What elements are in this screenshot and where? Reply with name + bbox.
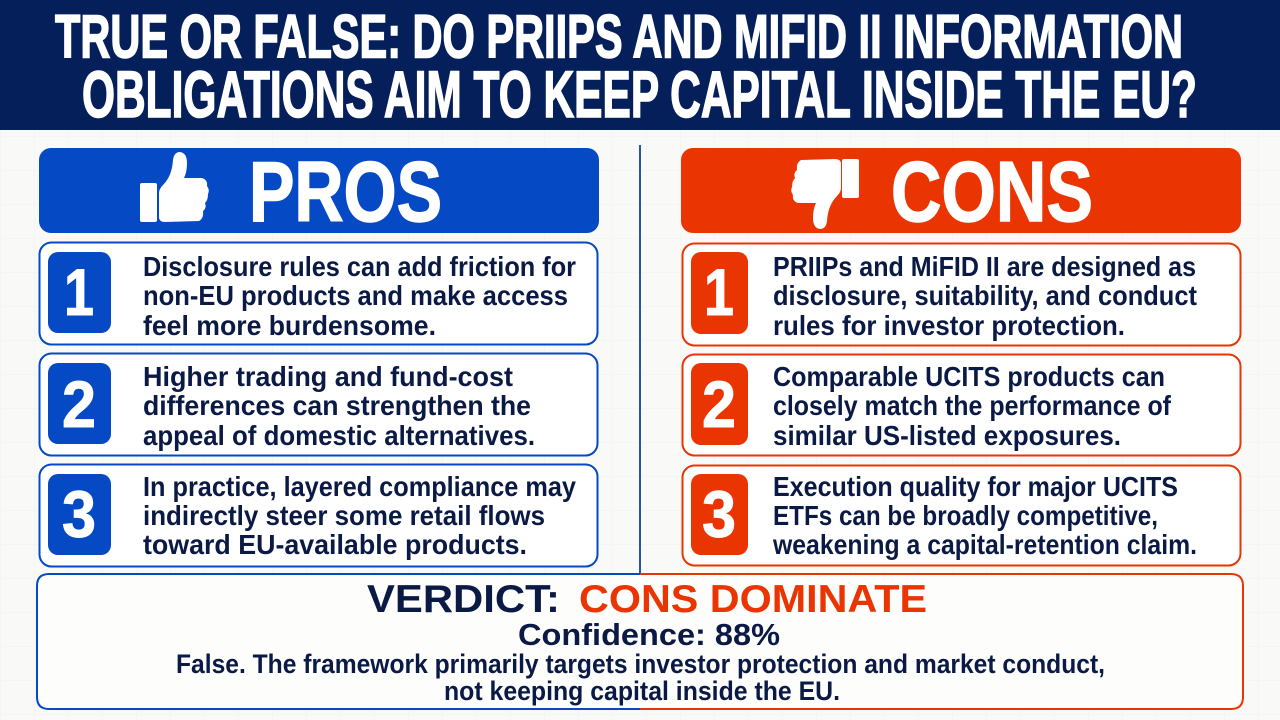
- cons item 2: similar US-listed exposures.: [773, 420, 1121, 451]
- cons item 1: disclosure, suitability, and conduct: [773, 280, 1197, 311]
- cons item 3: 3: [702, 477, 736, 551]
- verdict explanation: not keeping capital inside the EU.: [444, 676, 840, 706]
- cons item 3: [682, 466, 1240, 566]
- cons item 1: rules for investor protection.: [773, 310, 1125, 341]
- panel: cons: [681, 145, 1241, 566]
- cons header: CONS: [891, 145, 1093, 240]
- panel: pros: [39, 145, 599, 566]
- pros header: PROS: [249, 145, 442, 240]
- pros item 3: [40, 464, 598, 566]
- pros item 3: 3: [62, 477, 96, 551]
- verdict heading: CONS DOMINATE: [579, 578, 927, 621]
- pros item 1: feel more burdensome.: [143, 310, 436, 341]
- verdict explanation: [176, 649, 1105, 706]
- cons item 2: 2: [702, 367, 736, 441]
- cons item 2: [682, 354, 1240, 456]
- pros item 2: differences can strengthen the: [143, 390, 531, 421]
- pros item 2: 2: [62, 367, 96, 441]
- verdict explanation: False. The framework primarily targets investor protection and market conduct,: [176, 649, 1105, 679]
- cons item 1: 1: [704, 255, 734, 329]
- pros item 1: Disclosure rules can add friction for: [143, 251, 576, 282]
- pros item 1: non-EU products and make access: [143, 280, 568, 311]
- pros item 2: Higher trading and fund-cost: [143, 361, 513, 392]
- icon: thumbs down: [791, 159, 859, 229]
- pros header: [39, 145, 599, 240]
- pros item 3: toward EU-available products.: [143, 529, 527, 560]
- cons item 3: ETFs can be broadly competitive,: [773, 500, 1158, 531]
- verdict heading: [367, 578, 927, 621]
- cons item 2: Comparable UCITS products can: [773, 361, 1165, 392]
- title banner: [0, 0, 1280, 131]
- panel: verdict: [37, 574, 1243, 709]
- cons header: [681, 145, 1241, 240]
- verdict heading: VERDICT:: [367, 578, 560, 621]
- icon: thumbs up: [140, 152, 209, 222]
- pros item 1: 1: [64, 255, 94, 329]
- cons item 2: closely match the performance of: [773, 390, 1172, 421]
- cons item 3: Execution quality for major UCITS: [773, 471, 1178, 502]
- center divider: [639, 145, 641, 574]
- pros item 3: In practice, layered compliance may: [143, 471, 577, 502]
- confidence: Confidence: 88%: [518, 617, 780, 652]
- pros item 2: [40, 354, 598, 456]
- pros item 1: [40, 242, 598, 344]
- cons item 1: [682, 244, 1240, 346]
- cons item 1: PRIIPs and MiFID II are designed as: [773, 251, 1196, 282]
- pros item 3: indirectly steer some retail flows: [143, 500, 545, 531]
- pros item 2: appeal of domestic alternatives.: [143, 420, 535, 451]
- cons item 3: weakening a capital-retention claim.: [772, 529, 1197, 560]
